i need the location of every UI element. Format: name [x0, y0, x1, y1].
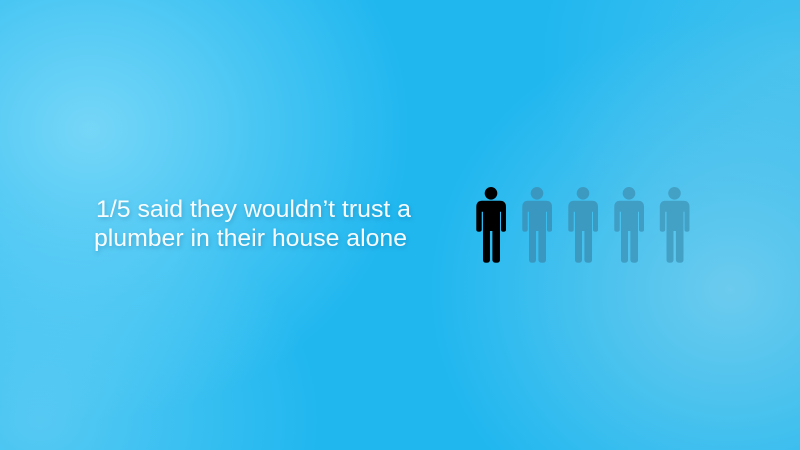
icon: faded person 4 — [614, 187, 644, 263]
icon: faded person 5 — [660, 187, 690, 263]
icon: faded person 3 — [568, 187, 598, 263]
icon: faded person 2 — [522, 187, 552, 263]
text block: statistic: 1/5 said they wouldn’t trust a — [96, 196, 412, 223]
text block: statistic: plumber in their house alone — [94, 225, 407, 252]
icon: highlighted person — [476, 187, 506, 263]
